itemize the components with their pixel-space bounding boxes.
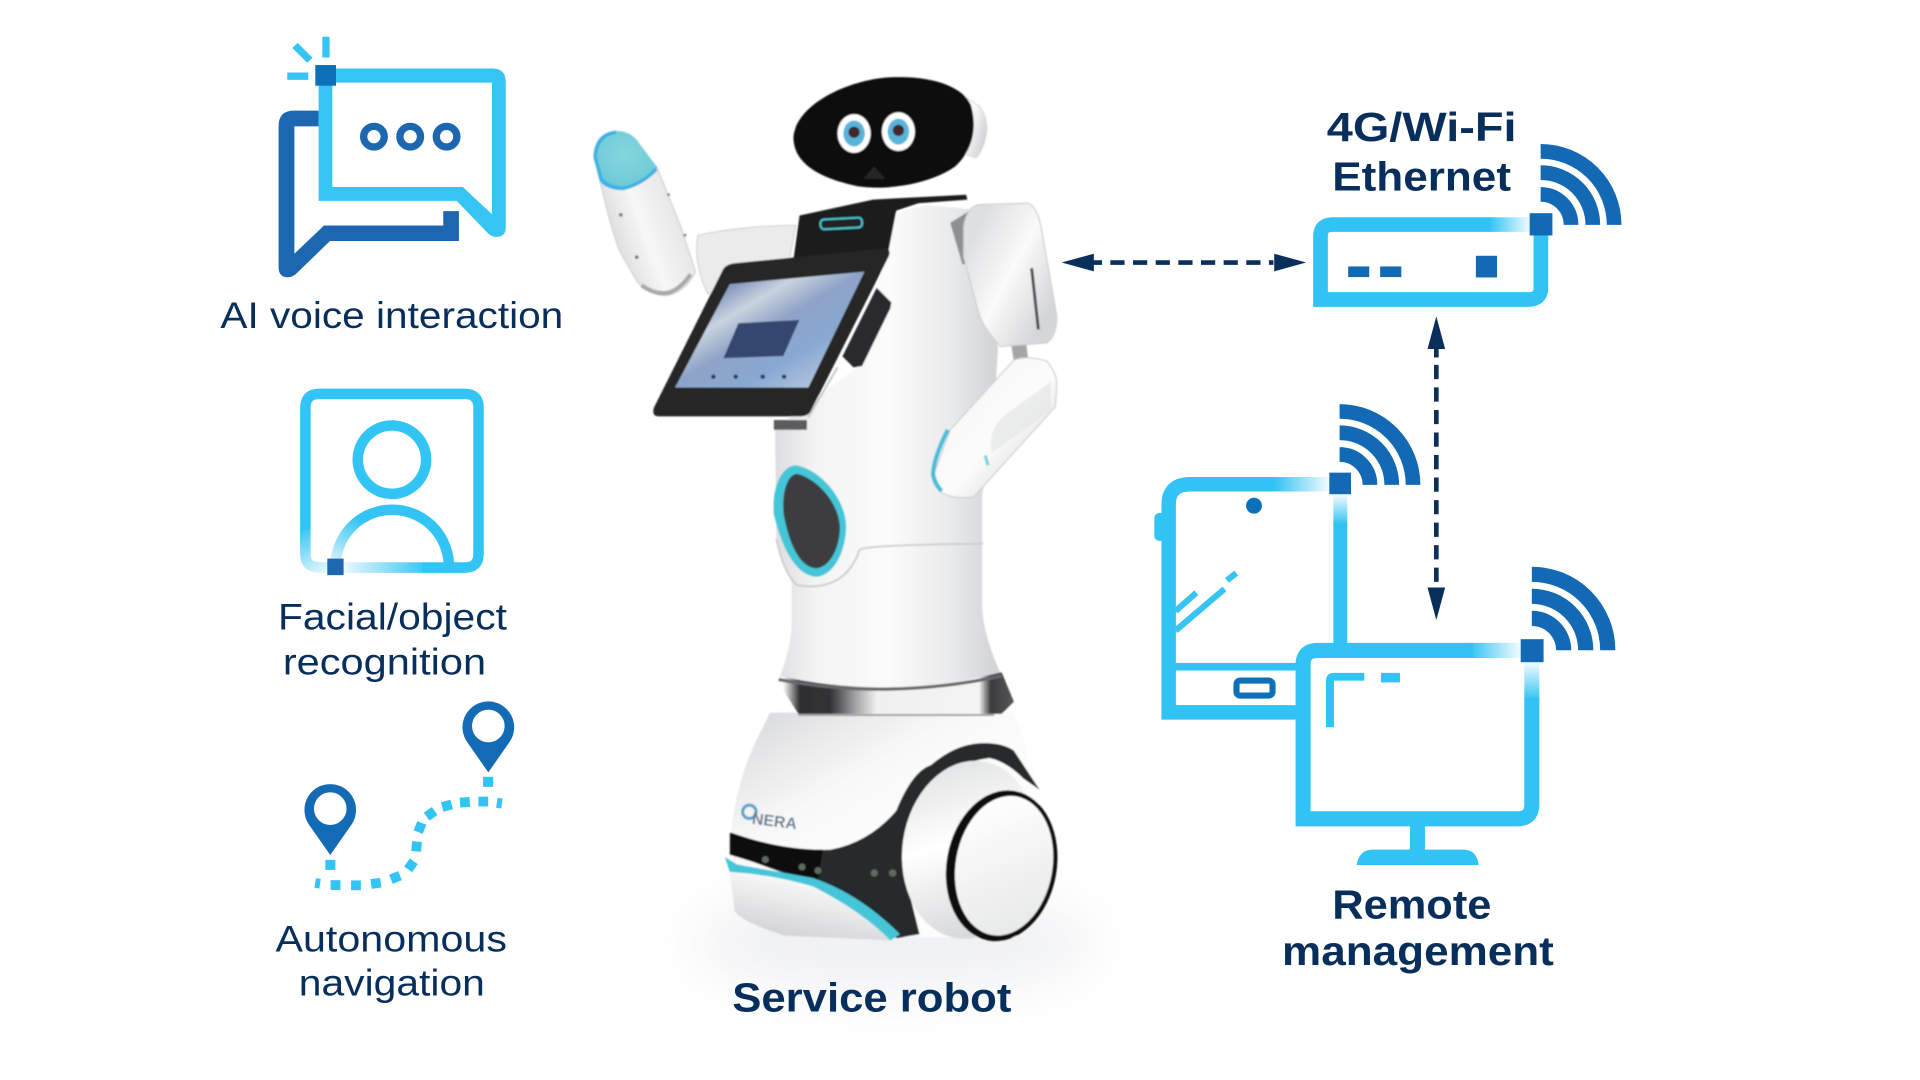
forearm teal mark [985, 456, 988, 465]
camera [1246, 498, 1262, 514]
stand [1357, 825, 1479, 865]
side button [1154, 513, 1171, 541]
wifi signal [1340, 411, 1413, 485]
raised arm connector [697, 225, 796, 294]
collar lower line [798, 714, 994, 716]
tablet body [653, 249, 890, 416]
arrow: router to devices [1428, 316, 1445, 620]
dark speech bubble [279, 111, 459, 277]
head ear [965, 97, 987, 158]
case fading edge [1488, 219, 1531, 231]
person head [358, 426, 426, 494]
dotted route [315, 777, 503, 890]
icon: AI voice chat bubbles [279, 37, 506, 277]
teal stripe [725, 857, 900, 940]
label: Service robot: Service robot [732, 974, 1011, 1020]
corner node [1329, 473, 1351, 494]
corner node [1521, 639, 1544, 662]
corner node [315, 65, 336, 86]
label: Remote management [1282, 881, 1554, 974]
label: Facial/object recognition [278, 595, 508, 683]
left forearm [600, 169, 696, 295]
service robot illustration [593, 77, 1069, 950]
label: Autonomous navigation: navigation [299, 962, 485, 1004]
right eye [882, 112, 915, 151]
arrow: robot to router [1062, 254, 1306, 271]
nose [863, 167, 885, 179]
corner node [327, 559, 344, 575]
hand blue edge [595, 132, 656, 189]
label: 4G/Wi-Fi Ethernet [1327, 104, 1517, 199]
head [793, 77, 974, 188]
person shoulders right [365, 510, 449, 567]
base body [730, 713, 1041, 938]
wifi signal [1541, 151, 1614, 225]
label: 4G/Wi-Fi Ethernet: Ethernet [1332, 153, 1511, 199]
label: Facial/object recognition: Facial/object [278, 595, 508, 637]
waist lip line [776, 539, 983, 586]
tablet screen [675, 272, 864, 388]
tablet silver edge [808, 367, 838, 418]
wheel face [944, 788, 1064, 943]
brand logo [743, 805, 798, 833]
arm screws [619, 193, 686, 259]
top fade [1469, 644, 1522, 657]
forearm inner panel [991, 382, 1051, 453]
icon: monitor [1303, 574, 1608, 865]
tablet side grip [842, 288, 891, 367]
arm slot [1032, 268, 1038, 329]
frame fading left corner [305, 528, 337, 568]
person shoulders [336, 516, 367, 567]
three dots [364, 126, 457, 147]
chrome collar ring [779, 672, 1014, 714]
left eye [838, 114, 871, 153]
wheel housing [891, 752, 1049, 948]
screen highlight [1326, 673, 1400, 727]
label: Autonomous navigation [276, 917, 507, 1004]
monitor white fill [1303, 650, 1532, 819]
black neck and collar [793, 195, 967, 260]
map pin end [462, 701, 514, 772]
label: Remote management: management [1282, 928, 1554, 974]
label: Facial/object recognition: recognition [283, 641, 486, 683]
corner node [1530, 213, 1552, 235]
top fade [1273, 478, 1331, 490]
label: AI voice interaction: AI voice interaction [220, 294, 563, 336]
icon: facial recognition frame [305, 394, 479, 575]
forearm teal edge [933, 430, 948, 491]
sensor lights [762, 856, 896, 877]
label: Autonomous navigation: Autonomous [276, 917, 507, 959]
hand tip [593, 131, 658, 190]
spark lines [287, 37, 326, 76]
wifi signal [1532, 574, 1608, 650]
collar top edge [779, 676, 1002, 689]
black base band [730, 833, 823, 882]
black wheel swoosh [730, 743, 1040, 938]
wheel black ring [934, 781, 1069, 950]
light speech bubble [319, 68, 506, 237]
robot ground shadow [692, 891, 1096, 994]
home button [1236, 681, 1272, 696]
brand logo: NERA [751, 811, 798, 833]
belly ring [774, 465, 846, 577]
tablet under bracket [774, 420, 807, 430]
right forearm [933, 358, 1057, 498]
router case [1320, 225, 1541, 300]
torso and waist [775, 206, 1003, 690]
forearm grey cuff [642, 274, 691, 293]
label: Remote management: Remote [1332, 881, 1491, 927]
router lights [1348, 256, 1497, 277]
icon: navigation route [304, 701, 514, 890]
label: 4G/Wi-Fi Ethernet: 4G/Wi-Fi [1327, 104, 1517, 150]
frame fading bottom [336, 563, 424, 572]
belly speaker [783, 474, 840, 568]
icon: router [1320, 151, 1614, 300]
screen dark panel [723, 320, 799, 358]
right side [1335, 493, 1346, 644]
tablet outline [1169, 484, 1298, 712]
monitor outline [1303, 650, 1532, 819]
teal slot [820, 217, 862, 229]
divider [1173, 663, 1298, 671]
frame solid part [305, 394, 479, 568]
icon: tablet [1154, 411, 1413, 712]
right upper arm [964, 203, 1057, 347]
shoulder joint [950, 211, 977, 264]
screen glare [1176, 573, 1236, 631]
map pin start [304, 784, 356, 855]
screen buttons [711, 374, 786, 379]
right fade [1526, 661, 1538, 700]
elbow joint [1011, 343, 1029, 362]
base lower skirt [730, 872, 890, 940]
